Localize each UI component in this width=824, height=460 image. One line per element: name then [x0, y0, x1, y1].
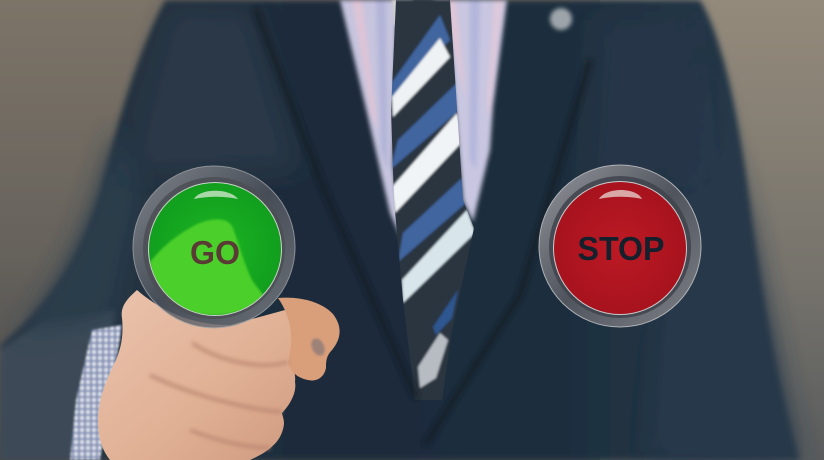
shirt cuff — [70, 325, 122, 460]
tie knot highlight — [392, 0, 413, 26]
shirt collar right — [433, 0, 507, 222]
tie stripes — [391, 0, 474, 400]
right lapel shadow — [425, 60, 590, 445]
finger creases — [150, 343, 288, 448]
STOP button metal ring — [539, 165, 701, 327]
necktie with stripes — [391, 0, 474, 400]
STOP button — [539, 165, 701, 327]
left sleeve light — [0, 310, 115, 460]
GO label: GO — [190, 234, 240, 271]
fingertip seen through green button — [150, 219, 263, 315]
shirt collar left — [340, 0, 402, 240]
GO button highlight — [194, 191, 238, 199]
hand pressing the button — [98, 290, 340, 460]
left lapel shadow — [255, 8, 416, 398]
back fingers and palm — [98, 290, 295, 460]
thumb — [278, 298, 340, 380]
thumbnail — [309, 336, 327, 358]
right sleeve light — [650, 60, 798, 460]
STOP button red face — [554, 182, 686, 314]
GO button green face — [149, 183, 281, 315]
STOP label: STOP — [578, 230, 664, 267]
lapel pin — [550, 8, 572, 30]
STOP button highlight — [599, 190, 642, 199]
GO button glass ring — [133, 166, 295, 328]
GO button — [133, 166, 295, 328]
